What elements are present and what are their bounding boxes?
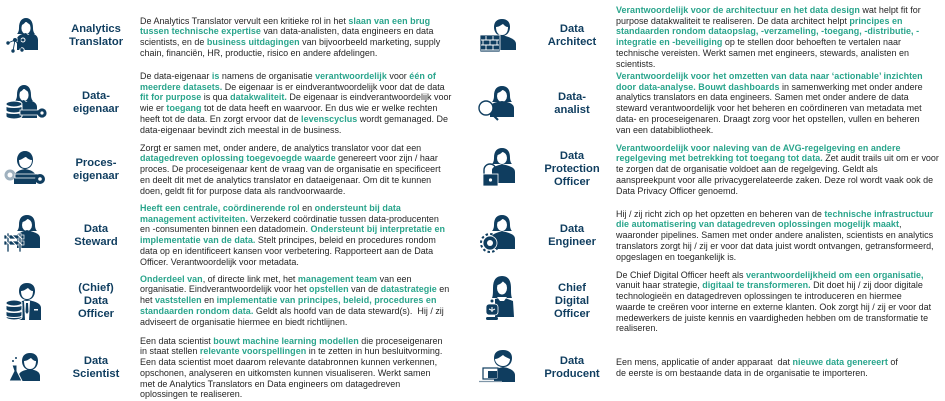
heading: Data Engineer xyxy=(548,222,596,248)
text: Data Architect: technische vereisten. Werkt samen met engineers, stewards, analisten en xyxy=(616,48,909,58)
text: Data Scientist: Een data scientist bouwt machine learning modellen die proceseigenaren xyxy=(140,336,443,346)
text: Chief Digital Officer: technologieën en datagedreven oplossingen te introduceren en hiermee xyxy=(616,291,902,301)
text: Data Steward: en -consumenten binnen een datadomein. Ondersteunt bij interpretatie en xyxy=(140,224,445,234)
heading: Data Engineer: Engineer xyxy=(548,236,596,248)
text: Data-eigenaar: wie er toegang tot de data heeft en waarvoor. En dus wie er welke rechten xyxy=(140,103,437,113)
heading: Data Steward: Data xyxy=(84,222,108,234)
text: Analytics Translator: chain, financiën, HR, productie, risico en andere afdelingen. xyxy=(140,48,377,58)
text: Proces-eigenaar: Zorgt er samen met, onder andere, de analytics translator voor dat een xyxy=(140,143,421,153)
icon: data-analist xyxy=(479,86,514,120)
icon: proces-eigenaar xyxy=(4,151,45,184)
text: Data Engineer: die automatisering van datagedreven oplossingen mogelijk maakt, xyxy=(616,219,901,229)
text: Data-analist: van een databibliotheek. xyxy=(616,125,713,135)
heading: Data Engineer: Data xyxy=(560,222,584,234)
heading: Data Protection Officer xyxy=(544,150,600,188)
text: Data Engineer: waaronder pipelines. Samen met onder andere analisten, scientists en analytics xyxy=(616,230,933,240)
heading: Chief Digital Officer: Officer xyxy=(554,308,590,320)
heading: Data Protection Officer: Officer xyxy=(554,176,590,188)
text: Data-analist xyxy=(616,71,923,135)
text: Data Protection Officer: Verantwoordelijk voor naleving van de AVG-regelgeving en andere xyxy=(616,143,900,153)
heading: (Chief) Data Officer: Data xyxy=(84,295,108,307)
text: Data Producent: Een mens, applicatie of ander apparaat dat nieuwe data genereert of xyxy=(616,357,898,367)
text: (Chief) Data Officer: standaarden rondom data. Geldt als hoofd van de data steward(s). Hij / zij xyxy=(140,306,444,316)
text: Data Producent xyxy=(616,357,898,378)
text: Data-analist: analytics translators en data engineers. Samen met onder andere de data xyxy=(616,92,909,102)
heading: Chief Digital Officer: Digital xyxy=(555,295,589,307)
text: Data Scientist: Een data scientist moet daarom relevante databronnen kunnen verkennen, xyxy=(140,357,437,367)
heading: Data Protection Officer: Protection xyxy=(544,163,600,175)
text: Data Engineer xyxy=(616,209,934,262)
heading: (Chief) Data Officer xyxy=(78,282,114,320)
heading: Data Scientist: Data xyxy=(84,354,108,366)
heading: Chief Digital Officer: Chief xyxy=(558,282,586,294)
text: (Chief) Data Officer xyxy=(140,274,449,327)
text: Data Architect: standaarden rondom dataopslag, -verzameling, -toegang, -distributie, - xyxy=(616,26,919,36)
text: Data Protection Officer: te zorgen dat de organisatie voldoet aan de regelgeving. Geldt als xyxy=(616,164,878,174)
heading: Data Architect: Architect xyxy=(548,36,596,48)
text: Data-eigenaar: De data-eigenaar is namens de organisatie verantwoordelijk voor één of xyxy=(140,71,436,81)
icon: chief digital officer xyxy=(486,276,514,320)
heading: Data Architect: Data xyxy=(560,23,584,35)
text: Data Steward xyxy=(140,203,445,267)
text: Data-analist: Verantwoordelijk voor het omzetten van data naar ‘actionable’ inzichten xyxy=(616,71,923,81)
text: Data Steward: Officer. Verantwoordelijk voor metadata. xyxy=(140,257,299,267)
heading: Analytics Translator: Translator xyxy=(69,36,123,48)
text: Chief Digital Officer: vanuit haar strategie, digitaal te transformeren. Dit doet hij / zij door digitale xyxy=(616,280,923,290)
text: Analytics Translator: scientists, en de business uitdagingen van bijvoorbeeld marketing, supply xyxy=(140,37,440,47)
text: Chief Digital Officer xyxy=(616,270,932,333)
text: Data Steward: implementatie van de data. Stelt principes, beleid en procedures rondom xyxy=(140,235,436,245)
text: (Chief) Data Officer: organisatie. Eindverantwoordelijk voor het opstellen van de datastrategie en xyxy=(140,284,449,294)
text: Data Engineer: translators zorgt hij / zij er voor dat data juist wordt ontvangen, getransformeerd, xyxy=(616,241,934,251)
text: Chief Digital Officer: medewerkers de juiste kennis en vaardigheden hebben om de transformatie te xyxy=(616,313,928,323)
heading: Chief Digital Officer xyxy=(554,282,590,320)
text: Proces-eigenaar: doen, geldt fit for purpose data als randvoorwaarde. xyxy=(140,186,345,196)
heading: Data Steward xyxy=(74,222,118,248)
text: Chief Digital Officer: De Chief Digital Officer heeft als verantwoordelijkheid om een organisatie, xyxy=(616,270,924,280)
text: Proces-eigenaar: en deelt dit met de analytics translator en dataeigenaar. Om dit te kunnen xyxy=(140,175,431,185)
text: Data-eigenaar: fit for purpose is qua datakwaliteit. De eigenaar is eindverantwoordelijk voor xyxy=(140,92,451,102)
heading: Analytics Translator: Analytics xyxy=(71,23,121,35)
text: Data-eigenaar xyxy=(140,71,452,135)
text: Data Engineer: Hij / zij richt zich op het opzetten en beheren van de technische infrastructuur xyxy=(616,209,933,219)
icon: data steward xyxy=(4,215,40,252)
text: Proces-eigenaar: proces. De proceseigenaar kent de vraag van de organisatie en specificeert xyxy=(140,164,441,174)
icon: data architect xyxy=(480,19,516,52)
text: Data Protection Officer: aanspreekpunt voor alle privacygerelateerde zaken. Deze rol wordt vaak ook de xyxy=(616,175,933,185)
text: Data Engineer: opgeslagen en toegankelijk is. xyxy=(616,252,736,262)
text: Analytics Translator: De Analytics Translator vervult een kritieke rol in het slaan van een brug xyxy=(140,16,430,26)
heading: Data-analist: analist xyxy=(554,104,590,116)
text: Data-analist: data- en proceseigenaren. Draagt zorg voor het opstellen, vullen en beheren xyxy=(616,114,920,124)
heading: Proces-eigenaar: Proces- xyxy=(75,156,117,168)
icon: data scientist xyxy=(9,353,40,381)
heading: Data Producent xyxy=(544,354,600,380)
heading: Data Architect xyxy=(548,23,596,48)
text: Data Producent: de eerste is om bestaande data in de organisatie te importeren. xyxy=(616,368,868,378)
text: Analytics Translator xyxy=(140,16,440,58)
icon: data-eigenaar xyxy=(6,85,47,119)
text: Data Scientist: oplossingen te realiseren. xyxy=(140,389,242,399)
heading: Data Scientist: Scientist xyxy=(73,368,119,380)
text: Data Steward: Heeft een centrale, coördinerende rol en ondersteunt bij data xyxy=(140,203,401,213)
heading: Data-analist: Data- xyxy=(558,90,586,102)
heading: Proces-eigenaar xyxy=(73,156,119,182)
text: Data Protection Officer: Data Privacy Officer genoemd. xyxy=(616,186,738,196)
text: Data Steward: management activiteiten. Verzekerd coördinatie tussen data-producenten xyxy=(140,214,439,224)
text: Data Architect: Verantwoordelijk voor de architectuur en het data design wat helpt fit for xyxy=(616,5,921,15)
icon: chief data officer xyxy=(6,283,41,320)
text: Data Steward: data op en identificeert kansen voor verbetering. Rapporteert aan de Data xyxy=(140,246,433,256)
heading: Data-analist xyxy=(554,90,590,116)
text: Analytics Translator: tussen technische expertise van data-analisten, data engineers en data xyxy=(140,26,433,36)
text: Proces-eigenaar xyxy=(140,143,441,196)
heading: (Chief) Data Officer: Officer xyxy=(78,308,114,320)
heading: Analytics Translator xyxy=(69,23,123,48)
heading: Data-eigenaar xyxy=(73,90,119,115)
heading: Data Producent: Data xyxy=(560,354,584,366)
text: Data Scientist: in staat stellen relevante voorspellingen in te zetten in hun besluitvorming. xyxy=(140,346,442,356)
icon: data producent xyxy=(479,350,515,382)
heading: Proces-eigenaar: eigenaar xyxy=(73,170,119,182)
text: Data Architect: purpose datakwaliteit te realiseren. De data architect helpt principes en xyxy=(616,16,903,26)
text: Data Architect: scientists. xyxy=(616,59,655,69)
text: Proces-eigenaar: datagedreven oplossing toegevoegde waarde genereert voor zijn / haar xyxy=(140,153,438,163)
heading: Data Producent: Producent xyxy=(544,368,600,380)
text: Data Protection Officer xyxy=(616,143,939,196)
text: Data-eigenaar: heeft tot de data. En zorgt ervoor dat de levenscyclus wordt gemanaged. De xyxy=(140,114,448,124)
text: Data Architect xyxy=(616,5,921,69)
text: Data Scientist: met de Analytics Translators en Data engineers om datagedreven xyxy=(140,379,400,389)
text: Data-analist: door data-analyse. Bouwt dashboards in samenwerking met onder andere xyxy=(616,82,923,92)
icon: data protection officer xyxy=(483,148,515,186)
heading: Data Scientist xyxy=(73,354,120,380)
icon: analytics translator xyxy=(6,18,38,53)
heading: Data-eigenaar: Data- xyxy=(82,90,110,102)
text: Data Architect: integratie en -beveiliging op te stellen door behoeften te vertalen naar xyxy=(616,37,901,47)
heading: Data Steward: Steward xyxy=(74,236,118,248)
text: Data Scientist xyxy=(140,336,443,399)
text: Data-eigenaar: meerdere datasets. De eigenaar is er eindverantwoordelijk voor dat de data xyxy=(140,82,445,92)
text: Chief Digital Officer: waarde te creëren voor interne en externe klanten. Ook zorgt hij / zij er voor dat xyxy=(616,302,931,312)
icon: data engineer xyxy=(481,215,515,252)
heading: Data-eigenaar: eigenaar xyxy=(73,103,119,115)
text: Data Protection Officer: regelgeving met betrekking tot toegang tot data. Zet audit trails uit om er voor xyxy=(616,153,939,163)
text: (Chief) Data Officer: het vaststellen en implementatie van principes, beleid, procedures en xyxy=(140,295,436,305)
heading: Data Protection Officer: Data xyxy=(560,150,584,162)
heading: (Chief) Data Officer: (Chief) xyxy=(78,282,114,294)
text: (Chief) Data Officer: Onderdeel van, of directe link met, het management team van een xyxy=(140,274,412,284)
text: Chief Digital Officer: realiseren. xyxy=(616,323,658,333)
text: Data Scientist: opschonen, analyseren en uitkomsten kunnen visualiseren. Werkt samen xyxy=(140,368,430,378)
text: Data-analist: steward verantwoordelijk voor het beheren en coördineren van metadata met xyxy=(616,103,922,113)
text: Data-eigenaar: data-eigenaar bevindt zich meestal in de business. xyxy=(140,125,341,135)
text: (Chief) Data Officer: adviseert de organisatie hiermee en biedt richtlijnen. xyxy=(140,317,347,327)
